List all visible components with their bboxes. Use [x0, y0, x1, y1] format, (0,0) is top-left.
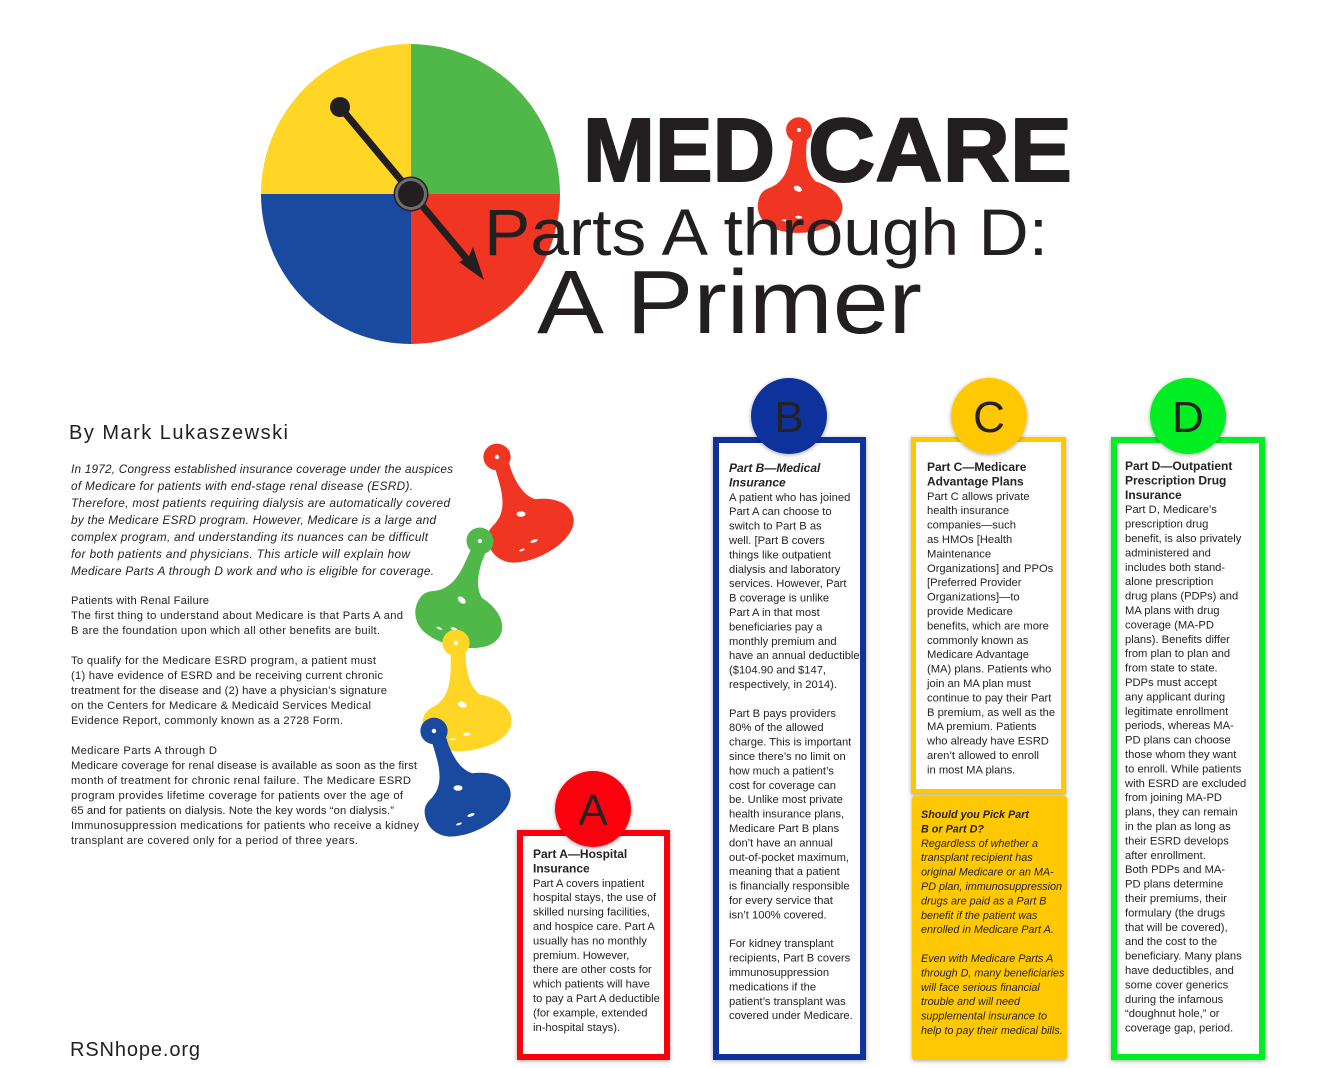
- Part C text: [Preferred Provider: [927, 577, 1022, 589]
- intro paragraph: for both patients and physicians. This article will explain how: [71, 547, 411, 561]
- Part C text: as HMOs [Health: [927, 534, 1012, 546]
- Part B text: for every service that: [729, 895, 834, 907]
- intro paragraph: Therefore, most patients requiring dialysis are automatically covered: [71, 496, 450, 510]
- Part B text: Medicare Part B plans: [729, 823, 839, 835]
- badge B: B: [774, 393, 804, 442]
- Part D text: legitimate enrollment: [1125, 706, 1229, 718]
- title: Medicare: CARE: [808, 101, 1072, 201]
- Part D text: Part D, Medicare’s: [1125, 504, 1217, 516]
- panel: Part D: [1114, 378, 1262, 1057]
- blue pawn: [420, 718, 511, 837]
- Part B text: health insurance plans,: [729, 809, 844, 821]
- badge C: [951, 378, 1027, 454]
- Part B text: Part A can choose to: [729, 506, 832, 518]
- callout: Should you pick Part B or Part D: original Medicare or an MA-: [921, 867, 1054, 879]
- Part C text: join an MA plan must: [926, 678, 1032, 690]
- intro paragraph: In 1972, Congress established insurance coverage under the auspices: [71, 462, 453, 476]
- Part C text: (MA) plans. Patients who: [927, 664, 1051, 676]
- Part C text: companies—such: [927, 520, 1016, 532]
- intro paragraph: complex program, and understanding its nuances can be difficult: [71, 530, 429, 544]
- Part D text: periods, whereas MA-: [1125, 720, 1234, 732]
- badge A: [555, 771, 631, 847]
- Part B text: Part A in that most: [729, 607, 821, 619]
- Part B text: charge. This is important: [729, 737, 852, 749]
- Part B text: Insurance: [729, 475, 786, 489]
- Part C text: MA premium. Patients: [927, 721, 1037, 733]
- spinner wheel: [261, 44, 560, 344]
- Part C text: who already have ESRD: [926, 736, 1049, 748]
- Part B text: cost for coverage can: [729, 780, 836, 792]
- Part D text: from joining MA-PD: [1125, 792, 1222, 804]
- Part D text: plans). Benefits differ: [1125, 634, 1230, 646]
- Part D text: to enroll. While patients: [1125, 763, 1242, 775]
- callout: Should you pick Part B or Part D: trouble and will need: [921, 996, 1021, 1008]
- Part C text: Advantage Plans: [927, 474, 1024, 488]
- Part C text: continue to pay their Part: [927, 692, 1052, 704]
- intro paragraph: of Medicare for patients with end-stage renal disease (ESRD).: [71, 479, 413, 493]
- Part B text: immunosuppression: [729, 967, 829, 979]
- intro paragraph: by the Medicare ESRD program. However, Medicare is a large and: [71, 513, 436, 527]
- badge D: D: [1172, 393, 1204, 442]
- Part C text: benefits, which are more: [927, 620, 1049, 632]
- Part B text: be. Unlike most private: [729, 794, 843, 806]
- section: Medicare Parts A through D: Immunosuppression medications for patients who receive a kidney: [71, 820, 419, 832]
- title: A Primer: A Primer: [537, 253, 922, 353]
- Part D text: administered and: [1125, 547, 1211, 559]
- Part D text: and the cost to the: [1125, 936, 1217, 948]
- callout: Should you pick Part B or Part D: transplant recipient has: [921, 852, 1033, 864]
- title: Medicare: [583, 101, 1072, 201]
- Part B text: isn’t 100% covered.: [729, 909, 827, 921]
- title pawn: red game piece as letter I: [746, 113, 871, 251]
- section: patients with renal failure: treatment for the disease and (2) have a physician’s signature: [71, 685, 387, 697]
- Part B text: patient’s transplant was: [729, 996, 846, 1008]
- Part A text: Part A—Hospital: [533, 847, 627, 861]
- callout: Should you pick Part B or Part D: B or Part D?: [921, 823, 984, 835]
- Part B text: how much a patient’s: [729, 765, 834, 777]
- panel: Part B: [716, 378, 863, 1057]
- Part D text: have deductibles, and: [1125, 965, 1234, 977]
- callout: Should you pick Part B or Part D: Regardless of whether a: [921, 838, 1038, 850]
- section: Medicare Parts A through D: month of treatment for chronic renal failure. The Medicare ESRD: [71, 775, 411, 787]
- Part D text: plans, they can remain: [1125, 807, 1238, 819]
- red pawn: [483, 444, 574, 563]
- Part D text: MA plans with drug: [1125, 605, 1220, 617]
- title: Medicare: MED: [583, 101, 775, 201]
- Part B text: things like outpatient: [729, 549, 832, 561]
- Part D text: coverage gap, period.: [1125, 1023, 1233, 1035]
- callout: Should you pick Part B or Part D: enrolled in Medicare Part A.: [921, 924, 1054, 936]
- Part D text: Part D—Outpatient: [1125, 459, 1232, 473]
- Part B text: dialysis and laboratory: [729, 564, 841, 576]
- Part C text: commonly known as: [927, 635, 1029, 647]
- Part D text: in the plan as long as: [1125, 821, 1231, 833]
- Part D text: coverage (MA-PD: [1125, 619, 1214, 631]
- section: patients with renal failure: Evidence Report, commonly known as a 2728 Form.: [71, 715, 343, 727]
- panel: Part A: [520, 771, 667, 1057]
- Part C text: Part C allows private: [927, 491, 1030, 503]
- section: Medicare Parts A through D: program provides lifetime coverage for patients over the age of: [71, 790, 404, 802]
- section: Medicare Parts A through D: Medicare Parts A through D: [71, 745, 217, 757]
- Part A text: skilled nursing facilities,: [533, 907, 650, 919]
- Part B text: ($104.90 and $147,: [729, 665, 826, 677]
- section: patients with renal failure: The first thing to understand about Medicare is that Parts A and: [71, 610, 403, 622]
- badge C: C: [973, 393, 1005, 442]
- Part B text: don’t have an annual: [729, 837, 833, 849]
- Part B text: meaning that a patient: [729, 866, 841, 878]
- Part B text: services. However, Part: [729, 578, 847, 590]
- Part D text: those whom they want: [1125, 749, 1237, 761]
- Part A text: to pay a Part A deductible: [533, 993, 660, 1005]
- Part D text: Insurance: [1125, 488, 1182, 502]
- byline: By Mark Lukaszewski: [69, 422, 288, 444]
- Part D text: their premiums, their: [1125, 893, 1227, 905]
- Part B text: is financially responsible: [729, 881, 850, 893]
- title: Parts A through D: Parts A through D:: [484, 195, 1048, 269]
- section: Medicare Parts A through D: transplant are covered only for a period of three years.: [71, 835, 358, 847]
- Part B text: covered under Medicare.: [729, 1010, 853, 1022]
- Part C text: Organizations] and PPOs: [927, 563, 1054, 575]
- Part D text: their ESRD develops: [1125, 835, 1229, 847]
- Part A text: which patients will have: [532, 979, 650, 991]
- callout: Should you pick Part B or Part D: Even with Medicare Parts A: [921, 953, 1053, 965]
- Part B text: well. [Part B covers: [728, 535, 825, 547]
- Part A text: Insurance: [533, 861, 590, 875]
- badge B: [751, 378, 827, 454]
- panel: Part C: [914, 378, 1064, 792]
- Part D text: from state to state.: [1125, 663, 1218, 675]
- Part A text: premium. However,: [533, 950, 629, 962]
- Part D text: “doughnut hole,” or: [1125, 1008, 1220, 1020]
- Part C text: Maintenance: [927, 548, 991, 560]
- Part A text: and hospice care. Part A: [533, 921, 655, 933]
- section: patients with renal failure: B are the foundation upon which all other benefits are built.: [71, 625, 380, 637]
- Part D text: that will be covered),: [1125, 922, 1228, 934]
- Part B text: since there’s no limit on: [729, 751, 846, 763]
- callout: Should you pick Part B or Part D: Should you Pick Part: [921, 809, 1029, 821]
- Part B text: recipients, Part B covers: [729, 953, 851, 965]
- Part D text: any applicant during: [1125, 691, 1225, 703]
- Part B text: monthly premium and: [729, 636, 837, 648]
- callout: Should you pick Part B or Part D: supplemental insurance to: [921, 1011, 1047, 1023]
- Part C text: in most MA plans.: [927, 764, 1015, 776]
- callout: Should you pick Part B or Part D: benefit if the patient was: [921, 910, 1038, 922]
- Part D text: benefit, is also privately: [1125, 533, 1242, 545]
- Part C text: Part C—Medicare: [927, 460, 1027, 474]
- Part D text: prescription drug: [1125, 519, 1208, 531]
- Part D text: Both PDPs and MA-: [1125, 864, 1225, 876]
- callout: Should you pick Part B or Part D: help to pay their medical bills.: [921, 1025, 1063, 1037]
- website: RSNhope.org: [70, 1039, 200, 1061]
- Part C text: health insurance: [927, 505, 1009, 517]
- Part A text: Part A covers inpatient: [533, 878, 645, 890]
- section: patients with renal failure: (1) have evidence of ESRD and be receiving current chronic: [71, 670, 383, 682]
- Part D text: Prescription Drug: [1125, 473, 1226, 487]
- Part D text: alone prescription: [1125, 576, 1213, 588]
- Part B text: B coverage is unlike: [729, 593, 829, 605]
- Part D text: from plan to plan and: [1125, 648, 1230, 660]
- section: patients with renal failure: Patients with Renal Failure: [71, 595, 209, 607]
- section: Medicare Parts A through D: Medicare coverage for renal disease is available as soon as the first: [71, 760, 418, 772]
- Part B text: out-of-pocket maximum,: [729, 852, 849, 864]
- Part C text: Organizations]—to: [927, 592, 1020, 604]
- intro paragraph: Medicare Parts A through D work and who is eligible for coverage.: [71, 564, 434, 578]
- Part A text: there are other costs for: [533, 964, 652, 976]
- Part D text: PD plans determine: [1125, 879, 1223, 891]
- Part D text: with ESRD are excluded: [1124, 778, 1246, 790]
- Part A text: (for example, extended: [533, 1007, 647, 1019]
- Part B text: For kidney transplant: [729, 938, 834, 950]
- Part C text: aren’t allowed to enroll: [927, 750, 1039, 762]
- Part C text: provide Medicare: [927, 606, 1013, 618]
- badge D: [1150, 378, 1226, 454]
- Part B text: 80% of the allowed: [729, 722, 824, 734]
- Part C text: Medicare Advantage: [927, 649, 1029, 661]
- Part B text: switch to Part B as: [729, 521, 822, 533]
- Part D text: formulary (the drugs: [1125, 907, 1226, 919]
- Part D text: beneficiary. Many plans: [1125, 951, 1242, 963]
- Part C text: B premium, as well as the: [927, 707, 1055, 719]
- callout: Should you pick Part B or Part D: drugs are paid as a Part B: [921, 895, 1046, 907]
- Part D text: during the infamous: [1125, 994, 1224, 1006]
- Part B text: medications if the: [729, 981, 816, 993]
- callout: Should you pick Part B or Part D: PD plan, immunosuppression: [921, 881, 1062, 893]
- Part D text: PD plans can choose: [1125, 735, 1231, 747]
- Part B text: A patient who has joined: [729, 492, 850, 504]
- Part D text: includes both stand-: [1125, 562, 1225, 574]
- Part B text: have an annual deductible: [729, 650, 860, 662]
- Part D text: some cover generics: [1125, 979, 1229, 991]
- spinner arrow: [330, 97, 484, 280]
- Part D text: after enrollment.: [1125, 850, 1206, 862]
- Part B text: Part B pays providers: [729, 708, 836, 720]
- Part A text: in-hospital stays).: [533, 1022, 620, 1034]
- callout: Should you pick Part B or Part D: [912, 796, 1068, 1060]
- callout: Should you pick Part B or Part D: will face serious financial: [921, 982, 1040, 994]
- section: Medicare Parts A through D: 65 and for patients on dialysis. Note the key words “on dialysis.”: [71, 805, 394, 817]
- Part B text: Part B—Medical: [729, 461, 821, 475]
- Part D text: drug plans (PDPs) and: [1125, 591, 1238, 603]
- Part A text: hospital stays, the use of: [533, 892, 657, 904]
- Part B text: respectively, in 2014).: [729, 679, 837, 691]
- yellow pawn: [412, 626, 533, 766]
- section: patients with renal failure: To qualify for the Medicare ESRD program, a patient must: [71, 655, 377, 667]
- Part B text: beneficiaries pay a: [729, 621, 823, 633]
- Part D text: PDPs must accept: [1125, 677, 1218, 689]
- badge A: A: [578, 786, 608, 835]
- section: patients with renal failure: on the Centers for Medicare & Medicaid Services Medical: [71, 700, 371, 712]
- green pawn: [402, 522, 547, 671]
- callout: Should you pick Part B or Part D: through D, many beneficiaries: [921, 967, 1065, 979]
- Part A text: usually has no monthly: [533, 935, 647, 947]
